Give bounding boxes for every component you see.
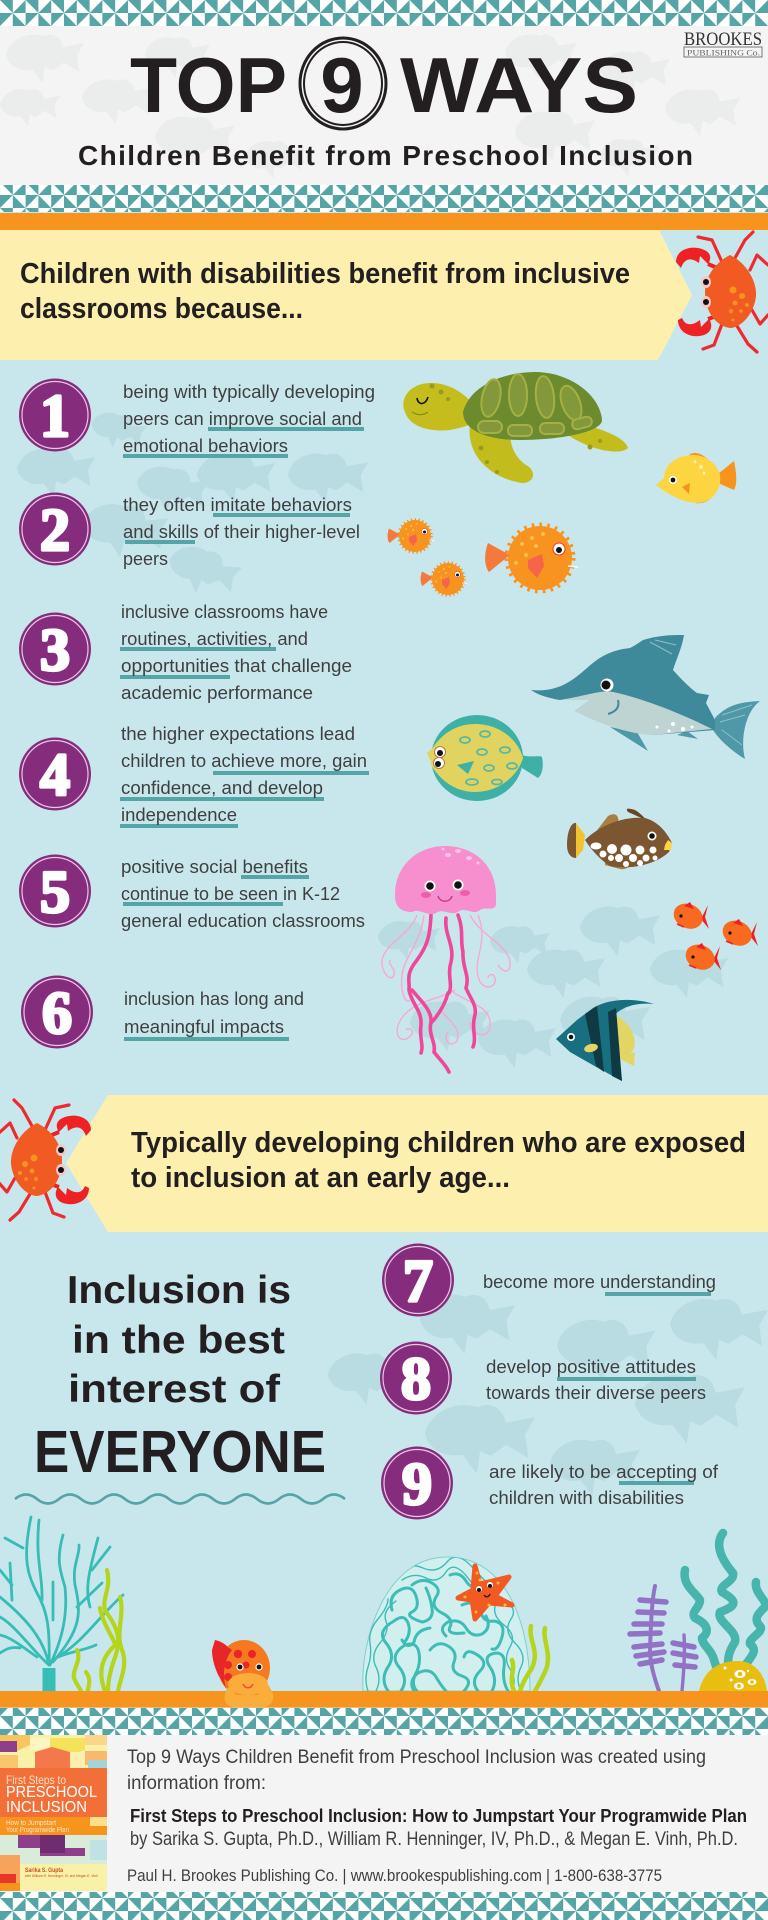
callout: inclusion is in the best interest of everyone [15,1269,345,1504]
text 4: children to achieve more, gain [121,750,367,771]
text 4: confidence, and develop [121,777,323,798]
icon: brown fish [567,809,672,869]
icon: puffer fish group [388,520,578,595]
icon: flat fish [427,715,543,801]
item 8 [380,1342,706,1414]
text 3: opportunities that challenge [121,655,352,676]
badge 3: 3 [40,617,70,683]
badge 1: 1 [40,383,70,449]
text 2: peers [123,548,168,569]
text 9: children with disabilities [489,1487,684,1508]
badge 1 [19,378,91,452]
icon: yellow rock [699,1661,767,1691]
text 4: the higher expectations lead [121,723,355,744]
book cover: INCLUSION [6,1799,87,1816]
text 6: meaningful impacts [124,1016,284,1037]
text 1: emotional behaviors [123,435,288,456]
section banner: typically developing [0,1095,768,1232]
icon: turtle [403,372,628,483]
heading: disabilities [20,258,630,325]
badge 4: 4 [40,742,70,808]
callout: inclusion is in the best interest of everyone: in the best [72,1319,285,1362]
title: WAYS [400,41,638,129]
orange bar [0,213,768,230]
heading: typically developing: to inclusion at an early age... [131,1162,510,1194]
source note: Top 9 Ways Children Benefit from Preschool Inclusion was created using [127,1747,706,1768]
source note [127,1747,706,1794]
callout: inclusion is in the best interest of everyone: Inclusion is [67,1269,291,1312]
publisher logo [684,29,762,58]
book cover: Sarika S. Gupta [25,1868,64,1874]
icon: brain coral [363,1557,530,1691]
badge 6: 6 [42,980,72,1046]
badge 5 [19,854,91,928]
heading: disabilities: Children with disabilities benefit from inclusive [20,258,630,290]
icon: branching coral [0,1517,123,1692]
heading: typically developing [131,1127,746,1194]
item 2 [19,492,360,569]
text 6 [124,988,304,1041]
badge 4 [19,738,91,810]
text 5 [121,856,365,931]
text 4 [120,723,369,828]
badge 8: 8 [401,1346,431,1412]
book reference [130,1806,747,1850]
text 5: general education classrooms [121,910,365,931]
icon: crab left [0,1100,91,1220]
text 4: independence [121,804,237,825]
source note: information from: [127,1773,266,1794]
bottom pattern band lower [0,1892,768,1920]
badge 9: 9 [402,1451,432,1517]
item 1 [19,378,375,458]
header panel [0,0,768,186]
text 2: and skills of their higher-level [123,521,360,542]
icon: starfish [458,1566,512,1619]
badge 7: 7 [403,1248,433,1314]
icon: crab right [676,232,768,352]
icon: hermit crab face and claws [224,1663,273,1707]
text 1: peers can improve social and [123,408,362,429]
orange seabed bar [0,1691,768,1708]
text 3: academic performance [121,682,313,703]
icon: hermit crab body shell [212,1640,270,1696]
text 7: become more understanding [483,1271,716,1292]
book cover: Your Programwide Plan [6,1825,69,1834]
book cover: First Steps to [6,1773,66,1787]
text 2: they often imitate behaviors [123,494,352,515]
book cover [0,1735,107,1891]
icon: jellyfish [382,846,510,1072]
bottom pattern band upper [0,1708,768,1735]
text 9: are likely to be accepting of [489,1461,719,1482]
badge 3 [19,612,91,686]
text 8: develop positive attitudes [486,1356,696,1377]
icon: swordfish [531,635,760,759]
badge 2: 2 [40,497,70,563]
text 5: positive social benefits [121,856,308,877]
top pattern band [0,0,768,26]
icon: purple seaweed [630,1586,696,1691]
title: TOP [130,41,287,129]
badge 8 [380,1342,452,1414]
text 9 [489,1461,719,1508]
badge 9 [381,1446,453,1520]
icon: yellow fish [656,453,736,503]
book cover: PRESCHOOL [6,1784,97,1801]
item 5 [19,854,365,931]
publisher contact: Paul H. Brookes Publishing Co. | www.brookespublishing.com | 1-800-638-3775 [127,1866,662,1885]
title: 9 [320,41,364,129]
text 2 [123,494,360,569]
heading: disabilities: classrooms because... [20,293,303,325]
footer panel [0,1735,768,1892]
item 3 [19,601,352,703]
badge 2 [19,492,91,566]
badge 7 [382,1244,454,1316]
item 6 [21,976,304,1048]
callout: inclusion is in the best interest of everyone: interest of [68,1368,281,1411]
icon: teal kelp [685,1533,766,1666]
section banner: disabilities [0,230,768,360]
text 8: towards their diverse peers [486,1382,706,1403]
text 3 [120,601,352,703]
text 3: inclusive classrooms have [121,601,328,622]
book cover: How to Jumpstart [6,1818,57,1827]
icon: green seaweed centre [512,1626,548,1691]
text 3: routines, activities, and [121,628,308,649]
icon: green seaweed left [74,1570,124,1691]
badge 6 [21,976,93,1048]
badge 5: 5 [40,859,70,925]
heading: typically developing: Typically developing children who are exposed [131,1127,746,1159]
fish silhouettes upper [17,409,768,1496]
item 9 [381,1446,719,1520]
subtitle: Children Benefit from Preschool Inclusion [78,140,693,171]
text 5: continue to be seen in K-12 [121,883,340,904]
text 1: being with typically developing [123,381,375,402]
icon: small orange fish trio [670,899,758,974]
item 7 [382,1244,716,1316]
second pattern band [0,185,768,212]
book cover: with William R. Henninger, IV, and Megan E. Vinh [25,1874,98,1878]
callout: inclusion is in the best interest of everyone: EVERYONE [34,1419,326,1485]
text 1 [123,381,375,458]
header fish silhouettes [0,34,740,178]
text 8 [486,1356,706,1403]
item 4 [19,723,369,828]
publisher logo: PUBLISHING Co. [687,48,760,58]
title [130,38,638,129]
icon: angelfish [556,1000,654,1081]
text 6: inclusion has long and [124,988,304,1009]
